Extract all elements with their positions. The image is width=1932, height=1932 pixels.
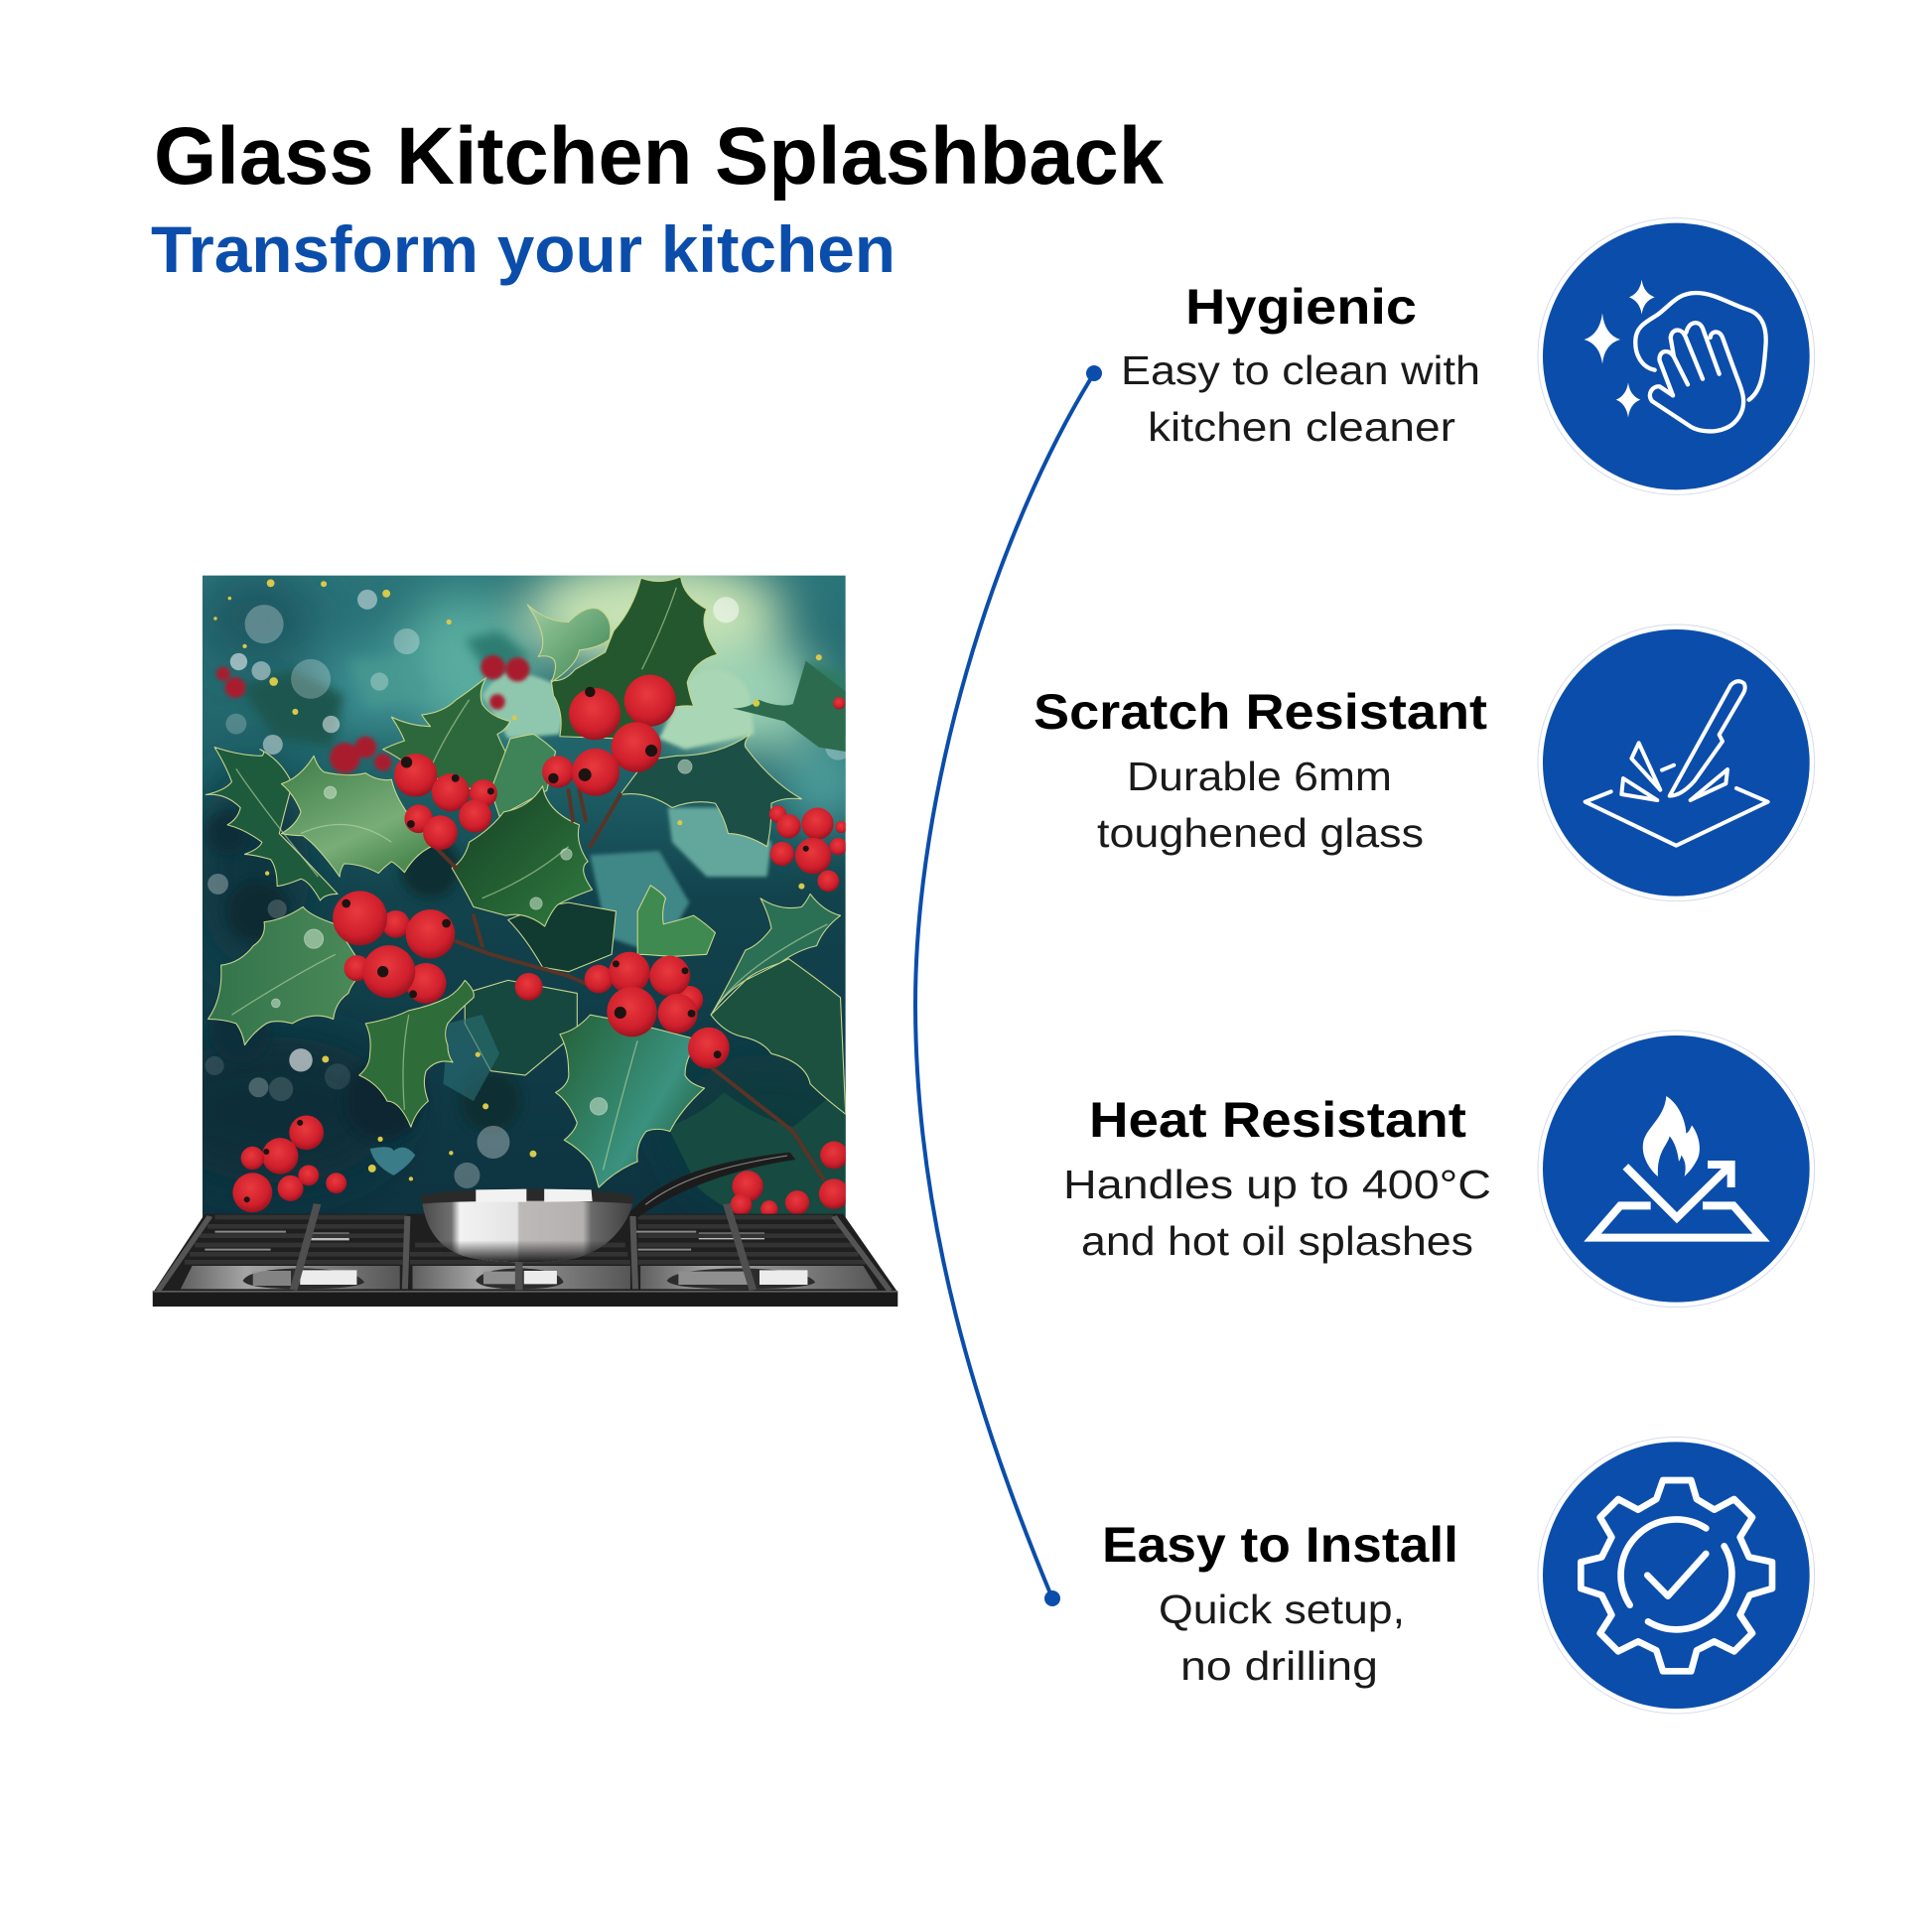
feature text: Hygienic: Easy to clean with: [1121, 347, 1480, 393]
feature text: Hygienic: Hygienic: [1185, 279, 1417, 335]
title: Glass Kitchen Splashback: [154, 111, 1164, 202]
icon: gear with check mark: [1538, 1437, 1815, 1714]
feature text: Scratch Resistant: Scratch Resistant: [1034, 684, 1487, 740]
burners: [243, 1233, 815, 1289]
golden sparkles: [213, 579, 822, 1181]
icon: knife on glass: [1538, 624, 1815, 901]
pan rim: [420, 1188, 634, 1204]
feature text: Hygienic: kitchen cleaner: [1148, 404, 1455, 450]
icon: hand wiping: [1538, 218, 1815, 494]
feature text: Heat Resistant: and hot oil splashes: [1081, 1218, 1473, 1264]
berry calyx marks: [244, 687, 809, 1202]
gas hob: [153, 1153, 897, 1307]
feature text: Scratch Resistant: Durable 6mm: [1127, 754, 1392, 799]
blurred distant berries: [216, 655, 529, 773]
feature text: Heat Resistant: [1063, 1092, 1491, 1264]
leaf veins: [231, 588, 827, 1171]
product image: holly splashback above gas hob: [153, 557, 897, 1307]
feature text: Easy to Install: Easy to Install: [1102, 1517, 1458, 1573]
icon: flame and deflection arrow: [1538, 1031, 1815, 1308]
feature text: Scratch Resistant: [1034, 684, 1487, 856]
curve end dot top: [1086, 365, 1102, 381]
pan handle: [629, 1153, 795, 1217]
hob front edge: [153, 1292, 897, 1307]
feature text: Heat Resistant: Handles up to 400°C: [1063, 1162, 1491, 1207]
feature text: Hygienic: [1121, 279, 1480, 450]
feature text: Scratch Resistant: toughened glass: [1097, 810, 1424, 856]
feature text: Easy to Install: Quick setup,: [1159, 1587, 1405, 1632]
feature text: Easy to Install: [1102, 1517, 1458, 1689]
subtitle: Transform your kitchen: [151, 212, 896, 286]
blurred background foliage: [206, 630, 846, 1140]
pan-support grates: [158, 1204, 890, 1291]
splashback panel: holly artwork: [203, 576, 846, 1217]
bokeh lights: [206, 590, 851, 1188]
curve end dot bottom: [1044, 1590, 1060, 1606]
holly leaves: [206, 577, 846, 1218]
frying pan: [420, 1153, 795, 1262]
stems: [430, 790, 823, 1178]
berries: [232, 675, 849, 1218]
hob body: [153, 1214, 897, 1293]
feature text: Easy to Install: no drilling: [1180, 1643, 1378, 1689]
pan body: [422, 1199, 633, 1262]
steel burner wells: [181, 1266, 878, 1289]
pale mint leaf shapes in the background: [483, 669, 771, 954]
feature text: Heat Resistant: Heat Resistant: [1089, 1092, 1466, 1148]
connector curve: [915, 365, 1102, 1606]
water drops: [271, 759, 692, 1115]
